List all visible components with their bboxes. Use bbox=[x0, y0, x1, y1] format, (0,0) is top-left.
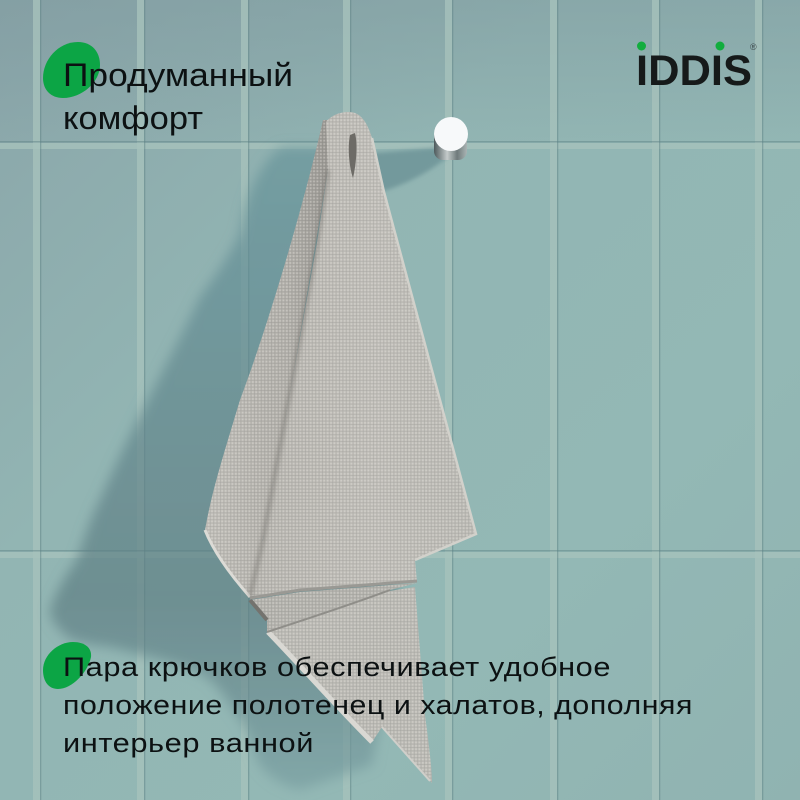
title text: Продуманный bbox=[63, 57, 293, 93]
description with green blob bbox=[43, 642, 701, 758]
description text: положение полотенец и халатов, дополняя bbox=[63, 690, 693, 720]
logo: IDDIS: ® bbox=[750, 42, 757, 52]
towel: main panel bbox=[250, 112, 476, 598]
towel: inner band bbox=[250, 583, 417, 632]
towel shadow on wall bbox=[50, 147, 400, 790]
towel: left fold bbox=[205, 120, 345, 597]
description text: интерьер ванной bbox=[63, 728, 314, 758]
title with green blob bbox=[43, 42, 302, 136]
hook bbox=[434, 117, 468, 160]
towel: lower tail bbox=[267, 587, 432, 783]
hook shadow on wall bbox=[372, 147, 450, 192]
towel bbox=[205, 112, 476, 783]
title text: комфорт bbox=[63, 100, 203, 136]
green blob: description bbox=[43, 642, 91, 689]
description text: Пара крючков обеспечивает удобное bbox=[63, 652, 611, 682]
green blob: title bbox=[43, 42, 100, 98]
logo: IDDIS: IDDIS bbox=[636, 47, 752, 95]
